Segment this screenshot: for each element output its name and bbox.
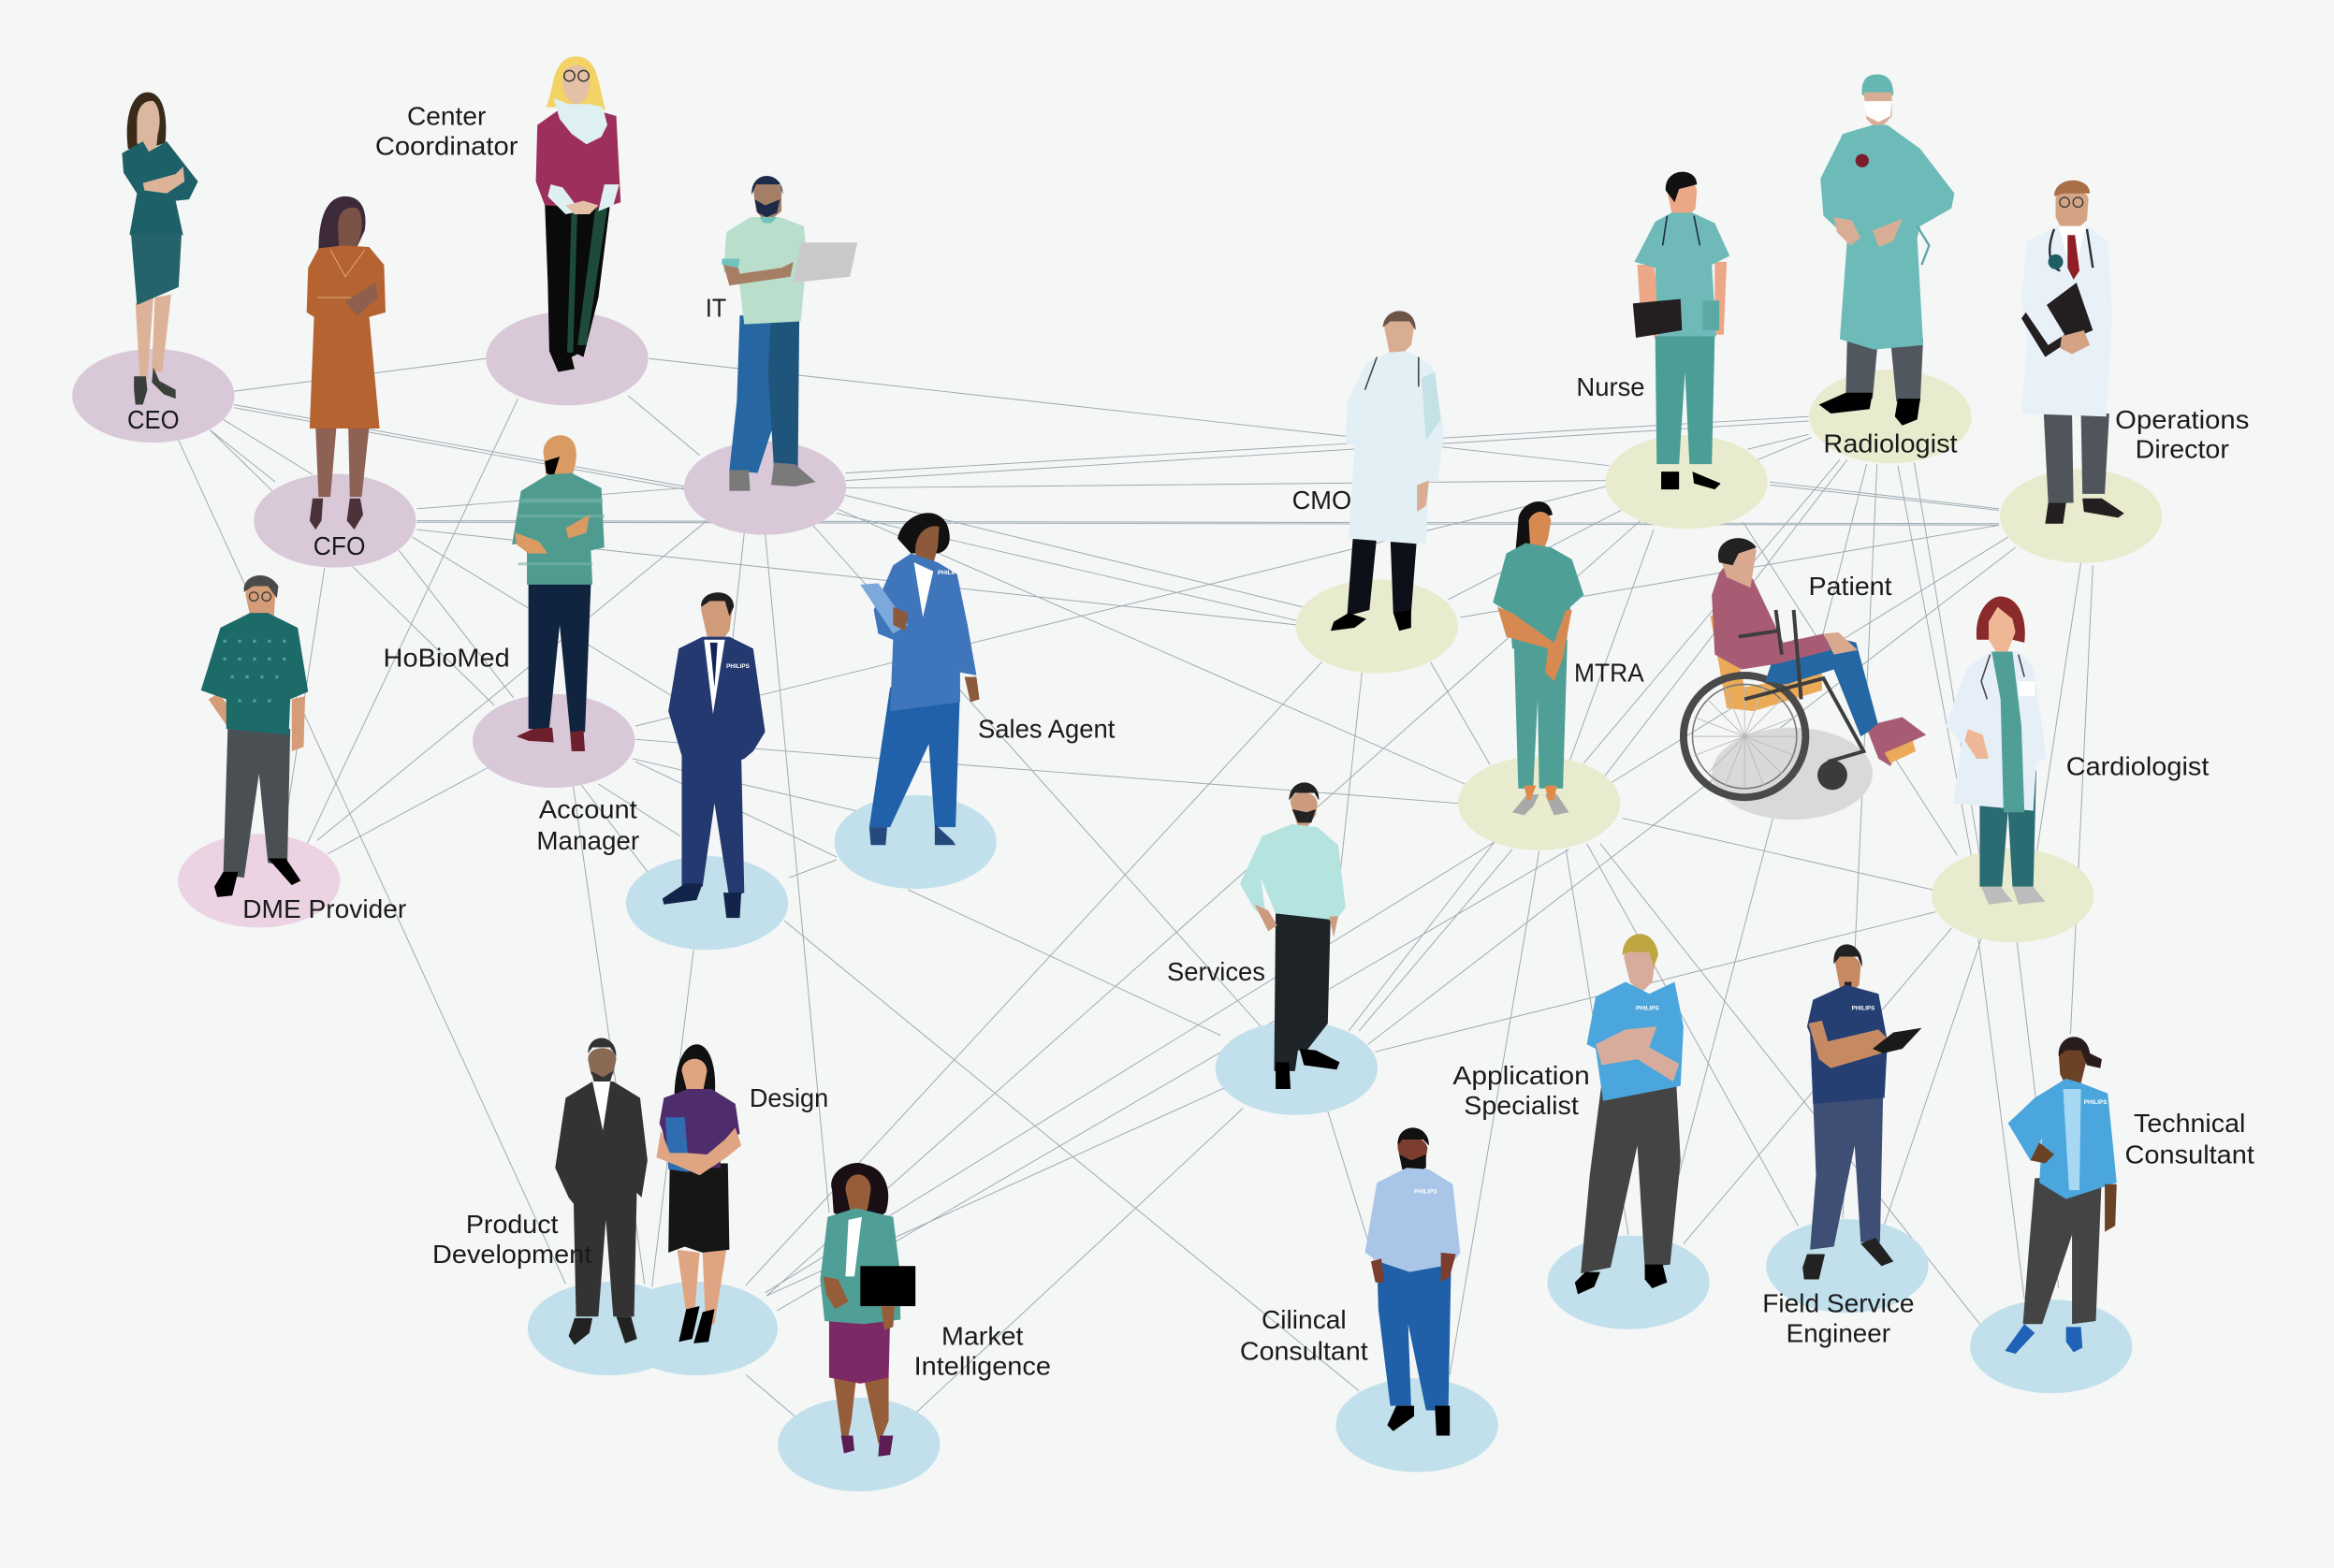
label: CEO: CEO	[127, 405, 180, 434]
figure: Center Coordinator	[536, 56, 620, 372]
label: Design: Design	[750, 1083, 828, 1112]
label: Field Service Engineer: Field Service	[1762, 1289, 1914, 1317]
label: Technical Consultant	[2125, 1109, 2254, 1169]
figure: Services	[1240, 782, 1346, 1089]
figure: CFO	[307, 196, 386, 530]
figure: CMO	[1331, 311, 1444, 631]
figure: Field Service Engineer	[1802, 944, 1921, 1280]
figure: Account Manager person	[663, 592, 766, 918]
label: Center Coordinator	[375, 102, 518, 160]
label: Market Intelligence: Market	[941, 1321, 1024, 1350]
label: Radiologist: Radiologist	[1823, 428, 1958, 457]
label: Application Specialist: Application	[1452, 1061, 1590, 1090]
label: Cilincal Consultant	[1240, 1305, 1368, 1365]
label: Technical Consultant: Technical	[2134, 1109, 2245, 1138]
figure: DME Provider person	[201, 575, 308, 897]
figure: Technical Consultant: PHILIPS	[2084, 1099, 2108, 1106]
figure: Clinical Consultant	[1365, 1127, 1460, 1435]
figure: Product Development person	[555, 1038, 648, 1344]
label: Operations Director: Director	[2136, 435, 2229, 464]
figure: Sales Agent	[860, 513, 980, 845]
figure: Market Intelligence person	[820, 1163, 915, 1457]
figure: HoBioMed person	[512, 435, 605, 751]
label: Sales Agent: Sales Agent	[978, 715, 1116, 744]
label: Application Specialist	[1452, 1061, 1590, 1120]
labels	[127, 102, 2254, 1380]
label: Market Intelligence: Intelligence	[914, 1351, 1051, 1380]
label: Cardiologist: Cardiologist	[2066, 751, 2210, 780]
base ellipses for all stakeholders	[72, 312, 2162, 1491]
figure: Account Manager person: PHILIPS	[726, 663, 750, 670]
label: Market Intelligence	[914, 1321, 1051, 1380]
network connection lines	[179, 358, 2093, 1425]
figure: Application Specialist	[1575, 934, 1684, 1294]
figure: Clinical Consultant: PHILIPS	[1414, 1188, 1437, 1195]
label: Account Manager: Account	[539, 795, 637, 824]
label: Services: Services	[1167, 957, 1265, 986]
label: Patient: Patient	[1809, 572, 1892, 601]
label: Cilincal Consultant: Cilincal	[1262, 1305, 1347, 1334]
figure: Sales Agent: PHILIPS	[938, 570, 961, 576]
label: Account Manager: Manager	[536, 826, 639, 855]
label: Center Coordinator: Center	[407, 102, 486, 131]
figure: Radiologist	[1819, 75, 1954, 426]
figure: IT professional	[722, 176, 857, 491]
label: Operations Director	[2115, 405, 2249, 464]
label: Center Coordinator: Coordinator	[375, 131, 518, 160]
label: Nurse: Nurse	[1576, 372, 1645, 401]
label: Product Development: Development	[432, 1240, 592, 1269]
figure: Operations Director	[2021, 181, 2124, 524]
label: MTRA: MTRA	[1574, 658, 1644, 687]
figure: Nurse	[1633, 172, 1729, 489]
label: DME Provider: DME Provider	[242, 894, 406, 923]
label: Account Manager	[536, 795, 639, 855]
figure: CEO	[122, 93, 198, 405]
label: Product Development: Product	[466, 1210, 559, 1239]
label: IT: IT	[706, 294, 726, 323]
label: HoBioMed: HoBioMed	[384, 643, 510, 672]
label: Technical Consultant: Consultant	[2125, 1140, 2254, 1169]
label: Operations Director: Operations	[2115, 405, 2249, 434]
label: Cilincal Consultant: Consultant	[1240, 1336, 1368, 1365]
figure: Technical Consultant	[2005, 1037, 2117, 1354]
figure: Design person	[656, 1044, 741, 1343]
label: CFO: CFO	[314, 531, 365, 560]
label: Product Development	[432, 1210, 592, 1269]
label: Field Service Engineer	[1762, 1289, 1914, 1347]
label: Application Specialist: Specialist	[1464, 1091, 1579, 1120]
figure: MTRA	[1493, 501, 1583, 815]
figure: Application Specialist: PHILIPS	[1636, 1006, 1659, 1012]
label: Field Service Engineer: Engineer	[1787, 1318, 1890, 1347]
label: CMO: CMO	[1292, 486, 1351, 515]
figure: Cardiologist	[1946, 597, 2047, 905]
figure: Patient in wheelchair	[1684, 538, 1926, 797]
figure: Field Service Engineer: PHILIPS	[1852, 1006, 1874, 1012]
